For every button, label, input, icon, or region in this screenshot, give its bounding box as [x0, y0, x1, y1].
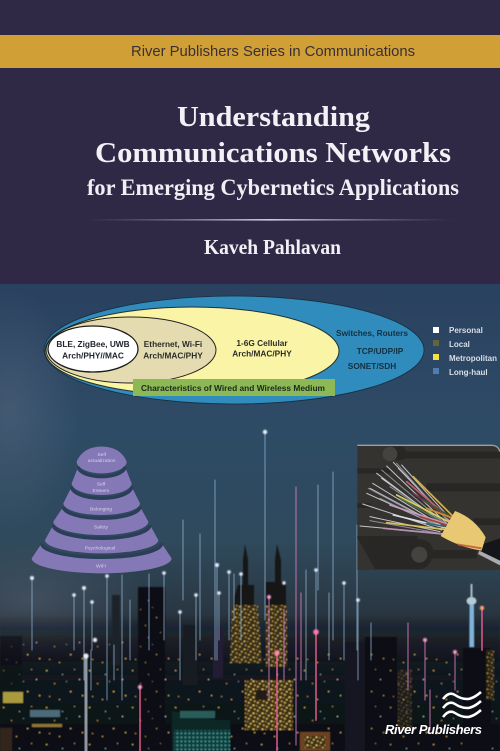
level: safety: [53, 507, 148, 535]
long-haul labels: Switches, Routers: [336, 328, 408, 338]
light beams: [32, 432, 482, 751]
pyramid labels: Psychological: [85, 545, 115, 551]
cover photo: smart city: [0, 284, 500, 751]
pyramid labels: Self: [97, 482, 106, 488]
legend: Long-haul: [449, 368, 488, 377]
skyline buildings: [0, 544, 500, 751]
personal label: BLE, ZigBee, UWB: [56, 339, 130, 349]
local label: Ethernet, Wi-Fi: [144, 339, 202, 349]
author: Kaveh Pahlavan: [204, 235, 341, 259]
metropolitan label: Arch/MAC/PHY: [232, 348, 292, 358]
tower: [470, 605, 474, 647]
pyramid labels: Safety: [94, 524, 109, 530]
legend: Local: [449, 340, 470, 349]
panel background: [357, 445, 500, 570]
medium bar: Characteristics of Wired and Wireless Medium: [141, 383, 325, 393]
legend: Personal: [449, 326, 483, 335]
personal label: Arch/PHY//MAC: [62, 350, 124, 360]
medium bar: [133, 379, 335, 396]
cable jacket: [480, 538, 500, 565]
publisher name: River Publishers: [385, 722, 482, 737]
title: Understanding: [177, 101, 371, 133]
network ellipse diagram: [44, 296, 424, 404]
legend: [433, 326, 497, 377]
teal building: [172, 711, 230, 751]
level: belonging: [63, 487, 140, 515]
pyramid labels: Belonging: [90, 506, 112, 512]
yellow towers: [232, 544, 258, 658]
long-haul labels: SONET/SDH: [348, 361, 396, 371]
River Publishers logo: [385, 692, 482, 737]
level: psychological: [45, 525, 158, 553]
pyramid of needs: [32, 447, 172, 573]
local ellipse: [46, 317, 216, 383]
local label: Arch/MAC/PHY: [143, 350, 203, 360]
logo waves: [443, 692, 481, 717]
legend: Metropolitan: [449, 354, 497, 363]
series band: [0, 35, 500, 68]
pyramid labels: Esteem: [93, 488, 109, 494]
title: [95, 101, 451, 169]
series band: River Publishers Series in Communications: [131, 44, 415, 60]
beam tips: [30, 430, 484, 689]
pyramid labels: Self: [97, 452, 107, 458]
long-haul labels: TCP/UDP/IP: [357, 346, 404, 356]
kevlar yarn: [441, 511, 486, 551]
top title panel: [0, 0, 500, 285]
pyramid labels: WiFi: [96, 564, 106, 570]
subtitle: for Emerging Cybernetics Applications: [87, 175, 459, 200]
metropolitan label: 1-6G Cellular: [236, 338, 288, 348]
level: self esteem: [72, 467, 132, 495]
level: self actualization: [77, 447, 127, 473]
personal ellipse: [48, 326, 138, 372]
metropolitan ellipse: [45, 307, 339, 395]
pyramid labels: actualization: [88, 458, 116, 464]
fibers: [360, 462, 457, 534]
title: Communications Networks: [95, 137, 451, 169]
fiber optic panel: [357, 445, 500, 570]
circuit traces: [357, 447, 500, 569]
pyramid labels: [85, 452, 116, 570]
long-haul ellipse: [44, 296, 424, 404]
level: wifi: [32, 543, 172, 573]
